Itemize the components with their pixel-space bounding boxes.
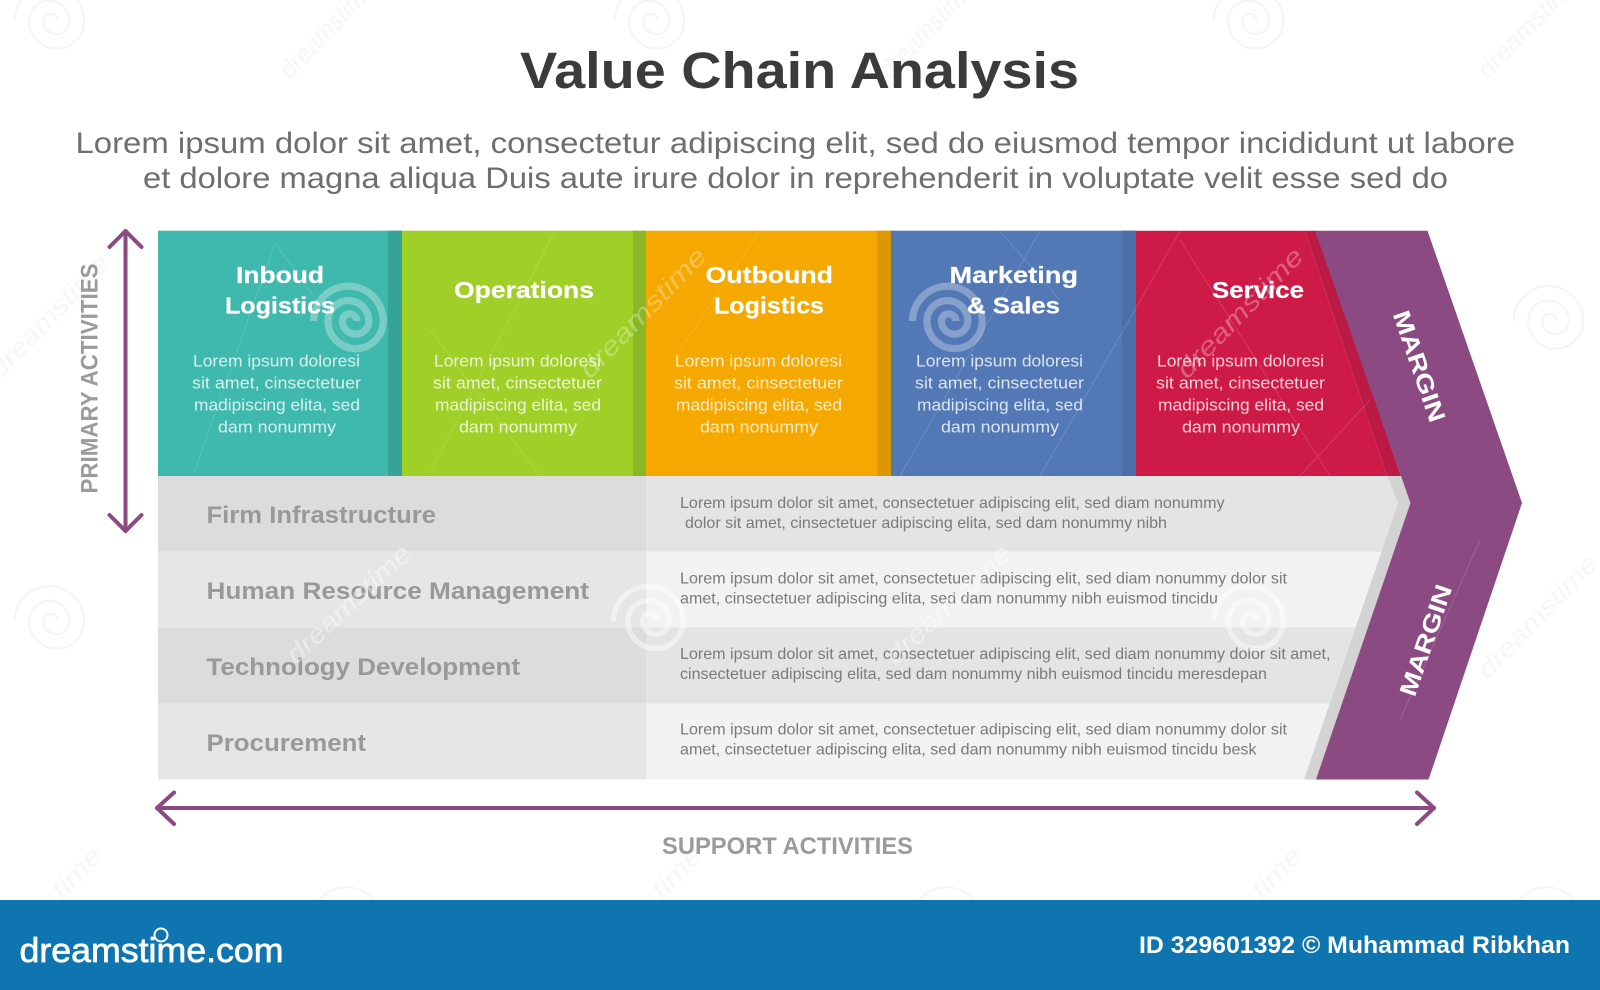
row: human resource management: amet, cinsectetuer adipiscing elita, sed dam nonummy nibh euismod tincidu [680, 590, 1218, 608]
text: dreamstime [1471, 548, 1600, 684]
panel: marketing and sales: & Sales [967, 292, 1060, 318]
text: time [45, 840, 108, 904]
row: procurement: Lorem ipsum dolor sit amet, consectetuer adipiscing elit, sed diam nonummy dolor sit [680, 722, 1288, 738]
panel: inbound logistics: Inboud [236, 262, 324, 288]
text: time [645, 840, 708, 904]
row: firm infrastructure: Firm Infrastructure [206, 502, 436, 529]
panel: outbound logistics: Logistics [714, 292, 824, 318]
panel: service [1136, 231, 1401, 476]
footer bar [0, 900, 1600, 990]
watermark overlays: dreamstime [1170, 241, 1309, 384]
panel: outbound logistics: Outbound [706, 262, 833, 288]
panel: inbound logistics: dam nonummy [218, 418, 337, 437]
subtitle text: et dolore magna aliqua Duis aute irure dolor in reprehenderit in voluptate velit esse sed do [143, 162, 1448, 195]
panel: outbound logistics: dam nonummy [700, 418, 819, 437]
panel: operations: Lorem ipsum doloresi [434, 352, 601, 371]
subtitle text: Lorem ipsum dolor sit amet, consectetur adipiscing elit, sed do eiusmod tempor incididunt ut labore [76, 127, 1515, 160]
panel: marketing and sales [891, 231, 1136, 476]
panel: operations [402, 231, 646, 476]
panel: service: dam nonummy [1182, 418, 1301, 437]
image id and credit: ID 329601392 © Muhammad Ribkhan [1139, 932, 1570, 959]
panel: inbound logistics: madipiscing elita, sed [194, 396, 360, 415]
row: firm infrastructure: dolor sit amet, cinsectetuer adipiscing elita, sed dam nonummy nibh [685, 515, 1167, 532]
panel: inbound logistics: sit amet, cinsectetuer [192, 374, 361, 393]
label: support activities: SUPPORT ACTIVITIES [662, 833, 913, 860]
panel: service: Service [1212, 277, 1304, 303]
panel: inbound logistics: Lorem ipsum doloresi [193, 352, 360, 371]
watermark overlays [194, 231, 1480, 720]
row: firm infrastructure [158, 476, 1398, 552]
panel: margin chevron [1315, 231, 1522, 779]
watermark overlays: dreamstime [880, 538, 1017, 669]
watermark overlays: dreamstime [280, 538, 417, 669]
arrow: support activities [157, 792, 1434, 824]
title: Value Chain Analysis [520, 42, 1079, 99]
panel: operations: dam nonummy [459, 418, 578, 437]
row: human resource management: Human Resource Management [206, 578, 589, 605]
row: procurement: Procurement [206, 730, 366, 757]
panel: inbound logistics: Logistics [225, 292, 335, 318]
label: margin upper: MARGIN [1387, 307, 1450, 426]
row: firm infrastructure: Lorem ipsum dolor sit amet, consectetuer adipiscing elit, sed diam nonummy [680, 495, 1224, 512]
panel: service: Lorem ipsum doloresi [1157, 352, 1324, 371]
row: human resource management [158, 552, 1382, 627]
icon: logo spiral [154, 928, 168, 942]
panel: operations: Operations [454, 277, 594, 303]
panel: service: sit amet, cinsectetuer [1156, 374, 1325, 393]
row: procurement [158, 704, 1331, 780]
panel: support activities rows [158, 476, 1398, 780]
label: primary activities: PRIMARY ACTIVITIES [76, 264, 104, 494]
row: technology development: cinsectetuer adipiscing elita, sed dam nonummy nibh euismod tincidu meresdepan [680, 666, 1267, 683]
footer logo: dreamstime.com [20, 932, 284, 970]
panel: operations: madipiscing elita, sed [435, 396, 601, 415]
panel: service: madipiscing elita, sed [1158, 396, 1324, 415]
panel: inbound logistics [158, 231, 402, 476]
panel: marketing and sales: Lorem ipsum doloresi [916, 352, 1083, 371]
watermark overlays: dreamstime [573, 241, 712, 384]
panel: marketing and sales: madipiscing elita, sed [917, 396, 1083, 415]
panel: operations: sit amet, cinsectetuer [433, 374, 602, 393]
row: technology development [158, 627, 1356, 704]
text: time [1245, 840, 1308, 904]
label: margin lower: MARGIN [1395, 581, 1458, 700]
row: human resource management: Lorem ipsum dolor sit amet, consectetuer adipiscing elit, sed diam nonummy dolor sit [680, 570, 1288, 588]
chart: value chain chevron [158, 231, 1522, 779]
row: procurement: amet, cinsectetuer adipiscing elita, sed dam nonummy nibh euismod tincidu besk [680, 742, 1257, 758]
row: technology development: Lorem ipsum dolor sit amet, consectetuer adipiscing elit, sed diam nonummy dolor sit amet, [680, 646, 1330, 663]
panel: outbound logistics: madipiscing elita, sed [676, 396, 842, 415]
panel: outbound logistics: Lorem ipsum doloresi [675, 352, 842, 371]
panel: outbound logistics: sit amet, cinsectetuer [674, 374, 843, 393]
panel: marketing and sales: dam nonummy [941, 418, 1060, 437]
panel: marketing and sales: Marketing [950, 262, 1078, 288]
row: technology development: Technology Development [206, 654, 520, 681]
arrow: primary activities [110, 231, 142, 531]
panel: outbound logistics [646, 231, 891, 476]
subtitle text [76, 127, 1515, 195]
panel: marketing and sales: sit amet, cinsectetuer [915, 374, 1084, 393]
